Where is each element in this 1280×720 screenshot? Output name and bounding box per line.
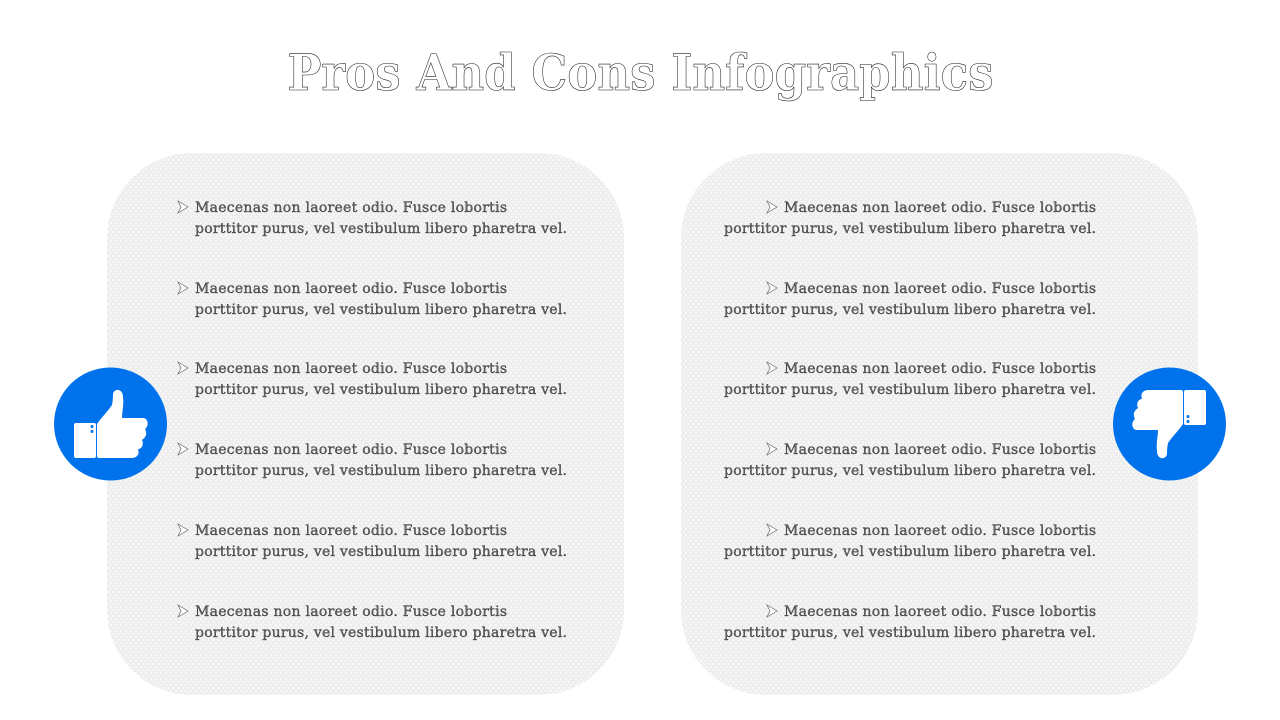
item 4 [724, 442, 1096, 479]
item 5: Maecenas non laoreet odio. Fusce lobortis [195, 523, 507, 539]
item 6: Maecenas non laoreet odio. Fusce lobortis [784, 604, 1096, 620]
item 3: porttitor purus, vel vestibulum libero pharetra vel. [724, 382, 1096, 398]
item 1 [178, 200, 567, 237]
item 3 [178, 361, 567, 398]
item 5: porttitor purus, vel vestibulum libero pharetra vel. [724, 544, 1096, 560]
title: Pros And Cons Infographics [288, 43, 994, 102]
panel: pros [107, 153, 624, 695]
item 5 [724, 523, 1096, 560]
item 6 [724, 604, 1096, 641]
item 2: Maecenas non laoreet odio. Fusce lobortis [195, 281, 507, 297]
item 4: Maecenas non laoreet odio. Fusce lobortis [784, 442, 1096, 458]
item 3 [724, 361, 1096, 398]
item 1: porttitor purus, vel vestibulum libero pharetra vel. [724, 221, 1096, 237]
item 5 [178, 523, 567, 560]
panel background: cons [681, 153, 1198, 695]
item 6: porttitor purus, vel vestibulum libero pharetra vel. [724, 625, 1096, 641]
item 5: porttitor purus, vel vestibulum libero pharetra vel. [195, 544, 567, 560]
item 5: Maecenas non laoreet odio. Fusce lobortis [784, 523, 1096, 539]
item 3: Maecenas non laoreet odio. Fusce lobortis [784, 361, 1096, 377]
item 3: Maecenas non laoreet odio. Fusce lobortis [195, 361, 507, 377]
item 4: porttitor purus, vel vestibulum libero pharetra vel. [724, 463, 1096, 479]
item 2 [178, 281, 567, 318]
item 1 [724, 200, 1096, 237]
item 3: porttitor purus, vel vestibulum libero pharetra vel. [195, 382, 567, 398]
item 6: porttitor purus, vel vestibulum libero pharetra vel. [195, 625, 567, 641]
item 6: Maecenas non laoreet odio. Fusce lobortis [195, 604, 507, 620]
item 2: Maecenas non laoreet odio. Fusce lobortis [784, 281, 1096, 297]
item 1: Maecenas non laoreet odio. Fusce lobortis [784, 200, 1096, 216]
icon: thumbs up [54, 368, 167, 480]
item 2: porttitor purus, vel vestibulum libero pharetra vel. [724, 302, 1096, 318]
item 2 [724, 281, 1096, 318]
item 4 [178, 442, 567, 479]
item 1: porttitor purus, vel vestibulum libero pharetra vel. [195, 221, 567, 237]
panel: cons [681, 153, 1198, 695]
icon: thumbs down [1113, 368, 1226, 480]
item 4: porttitor purus, vel vestibulum libero pharetra vel. [195, 463, 567, 479]
panel background: pros [107, 153, 624, 695]
item 2: porttitor purus, vel vestibulum libero pharetra vel. [195, 302, 567, 318]
item 1: Maecenas non laoreet odio. Fusce lobortis [195, 200, 507, 216]
item 6 [178, 604, 567, 641]
item 4: Maecenas non laoreet odio. Fusce lobortis [195, 442, 507, 458]
